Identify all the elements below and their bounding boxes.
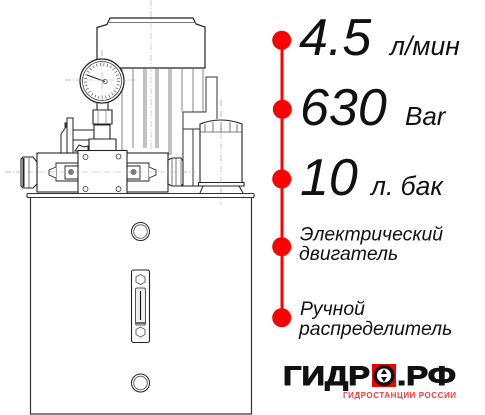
valve label	[298, 298, 452, 340]
icon: oil filter	[198, 100, 244, 205]
icon: lower plug	[132, 374, 150, 392]
pressure spec: Bar	[405, 101, 447, 131]
logo	[283, 361, 456, 400]
valve label: распределитель	[298, 318, 452, 340]
icon: level sight gauge	[132, 270, 150, 342]
flow rate spec	[299, 9, 460, 67]
tank volume spec	[300, 149, 444, 207]
icon: tank	[27, 194, 254, 414]
logo: ГИДРОСТАНЦИИ РОССИИ	[343, 391, 456, 400]
icon: electric motor	[97, 18, 217, 186]
icon: valve block	[5, 139, 195, 194]
tank volume spec: л. бак	[369, 171, 444, 201]
icon: logo red square	[372, 364, 396, 387]
hydraulic station drawing	[5, 0, 254, 414]
icon: upper plug	[132, 222, 150, 240]
pressure spec	[300, 79, 447, 137]
flow rate spec: 4.5	[299, 9, 372, 67]
red timeline	[272, 31, 292, 327]
center lines	[5, 0, 221, 205]
motor label	[299, 224, 443, 265]
tank volume spec: 10	[300, 149, 358, 207]
flow rate spec: л/мин	[388, 31, 460, 61]
logo: .РФ	[397, 361, 456, 391]
icon: bracket	[61, 118, 95, 153]
valve label: Ручной	[300, 298, 365, 320]
pressure spec: 630	[300, 79, 387, 137]
logo: ГИДР	[283, 361, 370, 391]
motor label: Электрический	[300, 224, 443, 246]
motor label: двигатель	[299, 243, 398, 265]
icon: pressure gauge	[65, 50, 135, 140]
